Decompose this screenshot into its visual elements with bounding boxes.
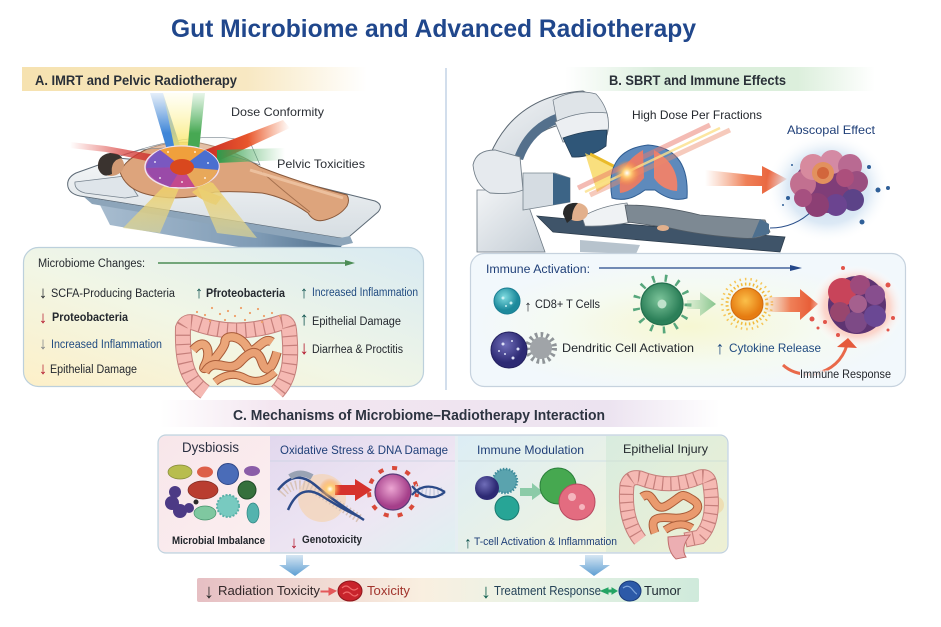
column: dysbiosis	[159, 436, 270, 552]
arrow: down to treatment response	[579, 555, 610, 576]
label: CD8+ T cells	[524, 297, 600, 315]
panel: immune activation	[470, 254, 906, 386]
label: genotoxicity	[290, 533, 363, 552]
label: high dose per fractions: High Dose Per Fractions	[632, 108, 762, 122]
icon: CD8 T cell	[494, 288, 520, 314]
list: left column changes: ↓	[39, 334, 47, 353]
list: left column changes: Proteobacteria	[52, 312, 129, 324]
label: cytokine release: ↑	[716, 338, 724, 358]
list: left column changes	[39, 283, 176, 378]
list: left column changes: ↓	[39, 283, 47, 302]
divider between panels A and B	[445, 68, 447, 390]
label: immune response: Immune Response	[800, 369, 891, 381]
icon: immune cells	[475, 468, 595, 520]
outcome: treatment response	[481, 581, 617, 603]
label: abscopal effect: Abscopal Effect	[787, 123, 876, 137]
list: right column changes: ↓	[299, 338, 309, 359]
list: middle column change	[195, 283, 286, 302]
label: cytokine release: Cytokine Release	[729, 341, 821, 355]
icon: blue tumor blob	[619, 581, 641, 601]
column: immune modulation	[458, 436, 606, 552]
outcome bar	[197, 578, 699, 603]
list: left column changes: ↓	[39, 308, 47, 327]
illustration: beam and lung target	[578, 125, 730, 199]
panel: C. Mechanisms of Microbiome–Radiotherapy Interaction	[158, 400, 728, 559]
heading and arrow: immune activation	[486, 264, 802, 276]
title: Gut Microbiome and Advanced Radiotherapy	[171, 15, 696, 43]
panel: B. SBRT and Immune Effects	[470, 67, 906, 386]
heading: section C	[160, 400, 720, 427]
column: dysbiosis: Dysbiosis	[182, 440, 239, 455]
list: left column changes: SCFA-Producing Bacteria	[51, 288, 176, 300]
list: right column changes: Diarrhea & Proctitis	[312, 344, 403, 356]
illustration: linear accelerator	[473, 91, 608, 252]
label: cytokine release	[716, 338, 821, 358]
list: left column changes: ↓	[39, 359, 47, 378]
heading and arrow: immune activation: Immune Activation:	[486, 264, 590, 276]
panel: A. IMRT and Pelvic Radiotherapy	[22, 67, 424, 392]
icon: intestines with bacteria dots	[183, 307, 290, 392]
label: T-cell activation and inflammation: ↑	[464, 535, 472, 552]
heading: section A	[22, 67, 367, 91]
list: middle column change: Pfroteobacteria	[206, 288, 286, 300]
heading: section A: A. IMRT and Pelvic Radiotherapy	[35, 73, 237, 88]
heading and arrow: microbiome changes	[38, 258, 355, 270]
outcome: treatment response: Treatment Response	[494, 584, 601, 598]
label: genotoxicity: Genotoxicity	[302, 534, 363, 546]
panel frame	[158, 435, 728, 553]
column: oxidative stress and DNA damage	[270, 436, 455, 552]
arrow: green cell to cytokine	[687, 292, 716, 316]
icon: injured intestine	[626, 477, 724, 559]
column: immune modulation: Immune Modulation	[477, 443, 584, 457]
icon: green activated cell	[636, 278, 688, 330]
label: genotoxicity: ↓	[290, 533, 298, 552]
heading and arrow: microbiome changes: Microbiome Changes:	[38, 258, 145, 270]
column: dysbiosis: Microbial Imbalance	[172, 535, 265, 547]
label: T-cell activation and inflammation: T-cell Activation & Inflammation	[474, 536, 617, 548]
column: epithelial injury	[606, 436, 727, 559]
label: tumor: Tumor	[644, 584, 681, 598]
icon: red toxicity blob	[338, 581, 362, 601]
outcome: radiation toxicity: ↓	[204, 581, 214, 603]
column: oxidative stress and DNA damage: Oxidative Stress & DNA Damage	[280, 443, 448, 457]
outcome: radiation toxicity	[204, 581, 336, 603]
label: dendritic cell activation: Dendritic Cell Activation	[562, 341, 694, 355]
icon: cytokine cell	[722, 279, 772, 329]
icon: damaged DNA and cell	[278, 468, 445, 522]
list: middle column change: ↑	[195, 283, 203, 302]
label: toxicity: Toxicity	[367, 584, 411, 598]
label: dose conformity: Dose Conformity	[231, 105, 324, 119]
list: right column changes: Epithelial Damage	[312, 316, 401, 328]
list: right column changes	[299, 283, 418, 359]
arrow: cytokine to tumor	[763, 289, 818, 320]
label: CD8+ T cells: ↑	[524, 298, 532, 315]
label: CD8+ T cells: CD8+ T Cells	[535, 297, 600, 311]
illustration: patient on SBRT couch	[537, 203, 785, 254]
arrow: to abscopal effect	[705, 166, 787, 194]
list: right column changes: ↑	[299, 309, 309, 330]
list: left column changes: Epithelial Damage	[50, 364, 137, 376]
illustration: patient on treatment couch with beams	[68, 93, 380, 249]
list: right column changes: Increased Inflammation	[312, 287, 418, 299]
label: pelvic toxicities: Pelvic Toxicities	[277, 157, 365, 171]
heading: section B	[565, 67, 875, 91]
list: right column changes: ↑	[300, 283, 308, 302]
icon: dendritic cells	[491, 332, 554, 368]
column: epithelial injury: Epithelial Injury	[623, 442, 708, 456]
list: left column changes: Increased Inflammation	[51, 339, 162, 351]
icon: abscopal tumor	[766, 133, 890, 243]
icon: mixed microbes	[165, 464, 260, 523]
outcome: treatment response: ↓	[481, 581, 491, 603]
label: T-cell activation and inflammation	[464, 535, 617, 552]
outcome: radiation toxicity: Radiation Toxicity	[218, 584, 321, 598]
arrow: down to radiation toxicity	[279, 555, 310, 576]
icon: immune-attacked tumor	[810, 265, 904, 349]
arrow: immune response curve	[783, 338, 857, 374]
panel: microbiome changes	[24, 248, 424, 392]
heading: section C: C. Mechanisms of Microbiome–Radiotherapy Interaction	[233, 408, 605, 424]
heading: section B: B. SBRT and Immune Effects	[609, 73, 786, 88]
